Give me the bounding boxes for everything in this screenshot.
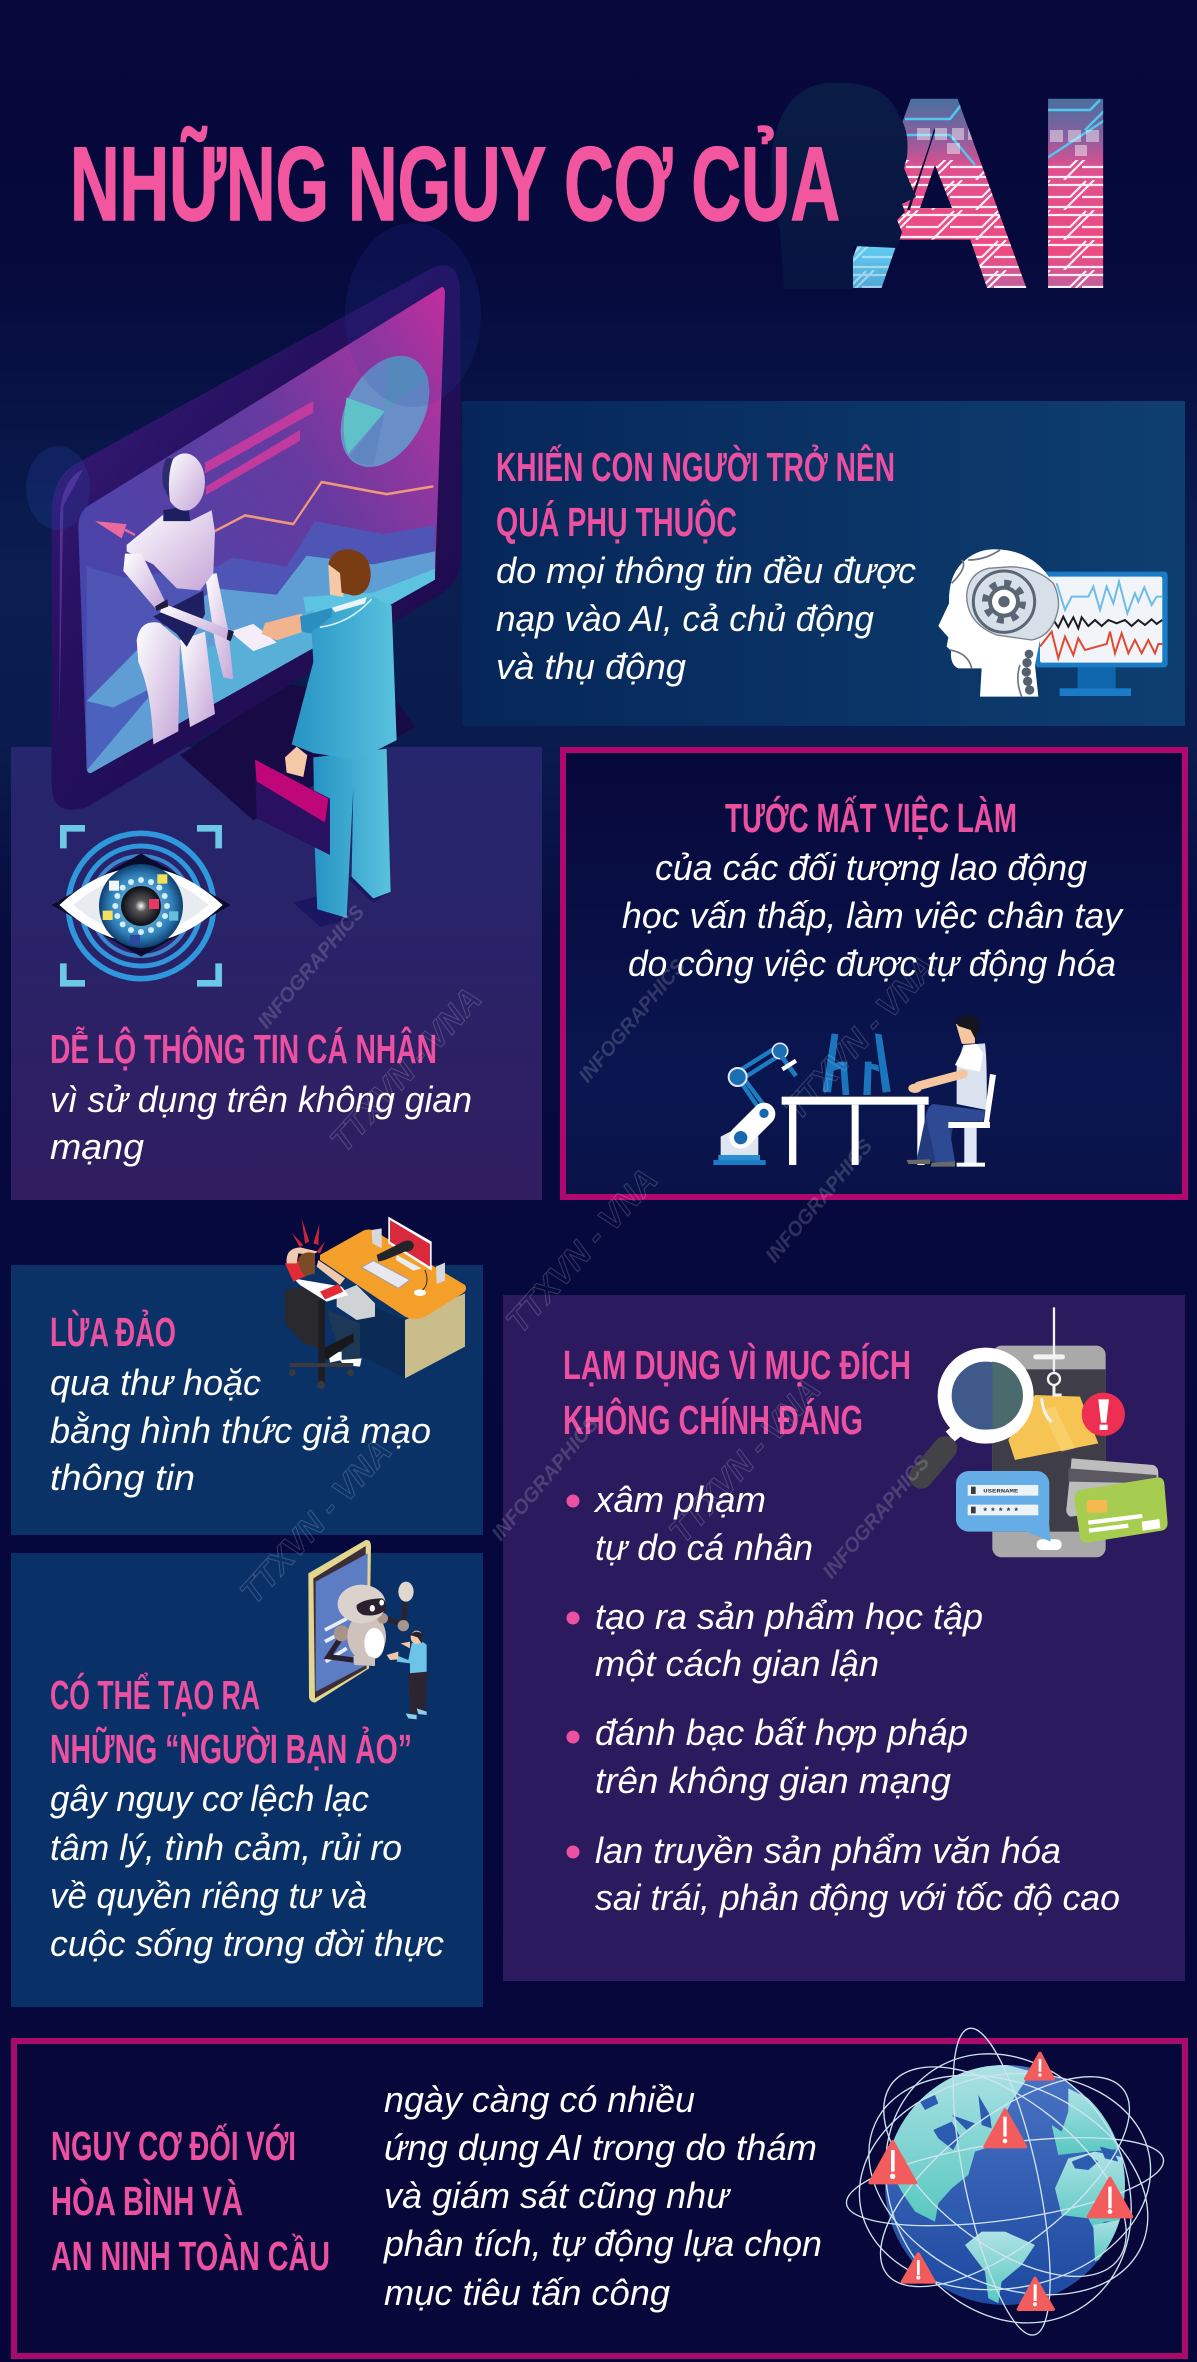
bullet list: tự do cá nhân <box>595 1527 813 1568</box>
logo: AI with head silhouette <box>771 82 1104 288</box>
robot <box>123 453 277 744</box>
businessman <box>255 549 397 927</box>
icon: robot in tablet <box>308 1540 428 1719</box>
text block: do công việc được tự động hóa <box>628 943 1116 984</box>
heading: KHIẾN CON NGƯỜI TRỞ NÊN <box>496 444 895 490</box>
monitor screen <box>78 287 445 773</box>
bullet list: một cách gian lận <box>595 1643 879 1684</box>
watermarks <box>232 901 943 1611</box>
bullet list <box>566 1479 1120 1918</box>
heading: NGUY CƠ ĐỐI VỚI <box>51 2123 296 2169</box>
text block: vì sử dụng trên không gian <box>50 1079 472 1120</box>
bullet list: trên không gian mạng <box>595 1760 951 1801</box>
watermarks: TTXVN - VNA <box>322 980 489 1159</box>
text block: tâm lý, tình cảm, rủi ro <box>50 1827 402 1868</box>
illustration: monitor with robot and businessman <box>52 265 462 927</box>
heading <box>51 2123 330 2279</box>
watermarks: TTXVN - VNA <box>661 1371 828 1550</box>
monitor stand <box>180 684 415 820</box>
panel: hòa bình và an ninh <box>14 2009 1185 2362</box>
heading <box>50 1671 412 1772</box>
panel: người bạn ảo <box>11 1540 483 2007</box>
text block: và thụ động <box>496 646 686 687</box>
monitor frame <box>52 265 462 810</box>
heading <box>563 1342 911 1443</box>
text block: về quyền riêng tư và <box>50 1875 367 1916</box>
head silhouette <box>771 83 916 289</box>
text block: mạng <box>50 1126 144 1167</box>
chart bars <box>205 401 313 495</box>
panel: lừa đảo <box>11 1217 483 1535</box>
text block: mục tiêu tấn công <box>384 2272 670 2313</box>
icon: eye <box>52 825 231 987</box>
heading <box>496 444 895 545</box>
heading: DỄ LỘ THÔNG TIN CÁ NHÂN <box>50 1026 437 1072</box>
bullet list: đánh bạc bất hợp pháp <box>595 1712 968 1753</box>
heading: LẠM DỤNG VÌ MỤC ĐÍCH <box>563 1342 911 1388</box>
icon: phishing phone: * * * * * <box>982 1506 1019 1517</box>
heading: CÓ THỂ TẠO RA <box>50 1671 260 1718</box>
text block: gây nguy cơ lệch lạc <box>50 1778 369 1819</box>
text block: bằng hình thức giả mạo <box>50 1410 431 1451</box>
panel: phụ thuộc <box>462 401 1185 726</box>
text block: cuộc sống trong đời thực <box>50 1923 444 1964</box>
heading: NHỮNG “NGƯỜI BẠN ẢO” <box>50 1726 412 1772</box>
text block: ứng dụng AI trong do thám <box>384 2127 817 2168</box>
bullet list: tạo ra sản phẩm học tập <box>595 1596 983 1637</box>
AI letters: I <box>1022 39 1129 347</box>
watermarks: TTXVN - VNA <box>232 1432 399 1611</box>
line chart <box>95 482 433 538</box>
heading: KHÔNG CHÍNH ĐÁNG <box>563 1397 863 1443</box>
text block: phân tích, tự động lựa chọn <box>383 2223 822 2264</box>
heading: QUÁ PHỤ THUỘC <box>496 499 737 545</box>
icon: stressed man at desk <box>285 1217 466 1389</box>
icon: phishing phone: USERNAME <box>983 1488 1018 1494</box>
bullet list: sai trái, phản động với tốc độ cao <box>595 1877 1120 1918</box>
icon: globe with alerts <box>846 2028 1164 2336</box>
panel: tước mất việc làm <box>563 750 1185 1197</box>
text block <box>622 847 1124 984</box>
heading: LỪA ĐẢO <box>50 1309 176 1355</box>
watermarks: INFOGRAPHICS <box>488 1413 604 1545</box>
text block: ngày càng có nhiều <box>384 2079 695 2120</box>
text block <box>496 550 916 687</box>
watermarks: INFOGRAPHICS <box>762 1135 878 1267</box>
text block: và giám sát cũng như <box>384 2175 731 2216</box>
icon: robot arm and office worker <box>713 1015 996 1167</box>
text block: học vấn thấp, làm việc chân tay <box>622 895 1124 936</box>
text block <box>50 1079 472 1167</box>
pie chart <box>324 333 446 489</box>
text block <box>50 1362 431 1498</box>
heading: HÒA BÌNH VÀ <box>51 2178 243 2224</box>
bullet list: xâm phạm <box>593 1479 766 1520</box>
panel: lạm dụng <box>503 1295 1185 1981</box>
watermarks: TTXVN - VNA <box>498 1161 665 1340</box>
watermarks: TTXVN - VNA <box>776 948 943 1127</box>
watermarks: INFOGRAPHICS <box>575 955 691 1087</box>
watermarks: INFOGRAPHICS <box>819 1451 935 1583</box>
icon: phishing phone <box>921 1307 1168 1557</box>
text block: qua thư hoặc <box>50 1362 261 1403</box>
heading: TƯỚC MẤT VIỆC LÀM <box>725 795 1017 841</box>
bullet list: lan truyền sản phẩm văn hóa <box>595 1830 1061 1871</box>
heading: AN NINH TOÀN CẦU <box>51 2233 330 2279</box>
text block: do mọi thông tin đều được <box>496 550 916 591</box>
text block: thông tin <box>50 1457 195 1498</box>
panel: dễ lộ thông tin <box>11 747 542 1200</box>
watermarks: INFOGRAPHICS <box>254 901 370 1033</box>
AI letters <box>853 98 1104 288</box>
icon: brain and monitor <box>938 549 1168 697</box>
text block <box>50 1778 444 1964</box>
text block: nạp vào AI, cả chủ động <box>496 598 874 639</box>
text block <box>383 2079 822 2313</box>
AI letters: A <box>835 40 1034 347</box>
text block: của các đối tượng lao động <box>655 847 1087 888</box>
decorative glow circles <box>26 223 481 530</box>
